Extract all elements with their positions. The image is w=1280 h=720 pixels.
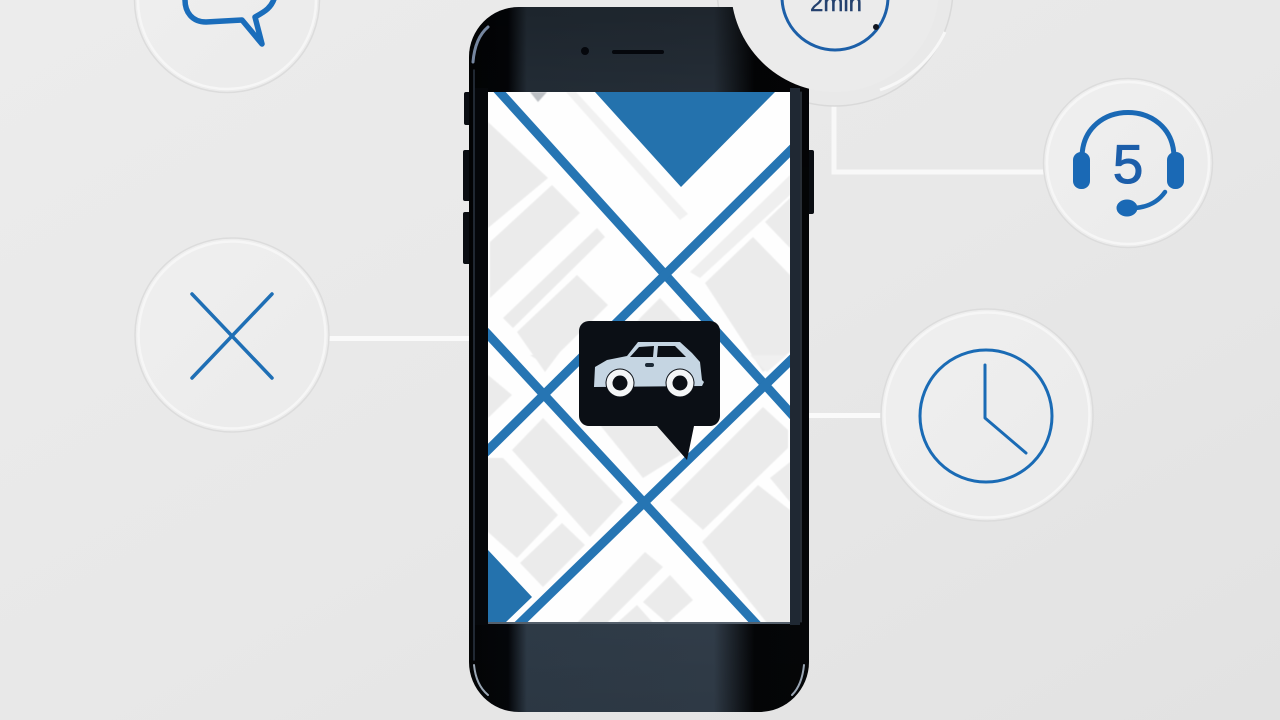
map blocks (488, 92, 790, 623)
icon: headset (1073, 112, 1184, 216)
connector: top timer to headset (834, 100, 1045, 172)
blue district bottom left (488, 550, 532, 623)
rating number: 5 (1113, 133, 1143, 195)
body vertical shading (469, 7, 809, 712)
timer disc (731, 0, 939, 92)
timer ring (782, 0, 888, 50)
car location bubble (579, 321, 720, 460)
connector: cancel icon to phone (329, 336, 474, 341)
map screen (484, 88, 795, 628)
phone body (469, 7, 809, 712)
circle: cancel (135, 238, 329, 432)
timer disc outer ring (717, 0, 953, 106)
camera dot (581, 47, 589, 55)
icon: speech bubble (185, 0, 275, 44)
phone (463, 7, 814, 712)
timer end dot (873, 24, 879, 30)
blue district top (595, 92, 775, 187)
car icon (594, 342, 704, 398)
icon: cross (192, 294, 272, 378)
blue roads (484, 88, 795, 628)
side buttons (463, 92, 814, 264)
icon: clock (920, 350, 1052, 482)
circle: support headset (1044, 78, 1212, 248)
speaker slot (612, 50, 664, 54)
connector: phone to clock (800, 413, 883, 418)
bubble shape (579, 321, 720, 460)
screen bottom edge (488, 622, 790, 624)
circle: chat (134, 0, 320, 92)
side highlights (473, 27, 804, 695)
circle: clock (881, 309, 1093, 521)
side bezels (790, 88, 800, 625)
